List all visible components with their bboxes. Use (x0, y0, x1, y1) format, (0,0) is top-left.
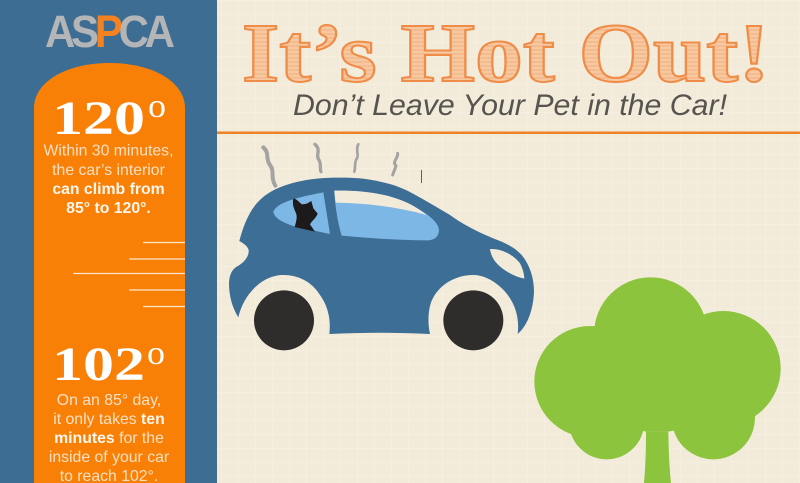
window glare (334, 191, 427, 215)
subtitle: Don’t Leave Your Pet in the Car! (293, 89, 727, 122)
front wheel (443, 290, 503, 350)
text: 102 degrees description: On an 85° day, (57, 392, 161, 409)
car body (229, 178, 534, 334)
heat waves (263, 144, 398, 186)
headlight (490, 249, 524, 279)
logo: ASPCA: ASPCA (45, 7, 175, 57)
text: 120 degrees description: 85° to 120°. (66, 200, 151, 217)
pet silhouette (293, 198, 318, 232)
tree crown (534, 277, 781, 459)
illustration: tree (534, 277, 781, 483)
text: 102 degrees description: inside of your car (49, 449, 169, 466)
text: 102 degrees description: it only takes ten (53, 411, 165, 428)
tree trunk (644, 432, 671, 483)
text: 120 degrees description: the car’s interior (52, 162, 165, 179)
blue sidebar (0, 0, 217, 483)
orange divider (217, 132, 800, 134)
stat: 120 degrees: 120 (52, 92, 145, 145)
paper background (217, 0, 800, 483)
stat: 102 degrees: 102 (52, 338, 145, 391)
title: It’s Hot Out! (242, 7, 770, 100)
rear wheel (254, 290, 314, 350)
text: 120 degrees description: Within 30 minutes, (44, 142, 173, 160)
stat: 120 degrees (52, 88, 166, 145)
thermometer tick marks (73, 242, 185, 306)
text: 120 degrees description (44, 142, 173, 217)
front window (334, 191, 439, 240)
text: 120 degrees description: can climb from (52, 181, 165, 198)
stat: 102 degrees: o (147, 335, 165, 372)
stat: 120 degrees: o (148, 88, 166, 125)
text: 102 degrees description (49, 392, 169, 483)
stat: 102 degrees (52, 335, 165, 391)
illustration: hot car (229, 144, 534, 350)
panel: orange thermometer (34, 63, 185, 483)
text: 102 degrees description: minutes for the (54, 430, 164, 447)
small tick (421, 170, 422, 183)
rear window (273, 192, 330, 234)
